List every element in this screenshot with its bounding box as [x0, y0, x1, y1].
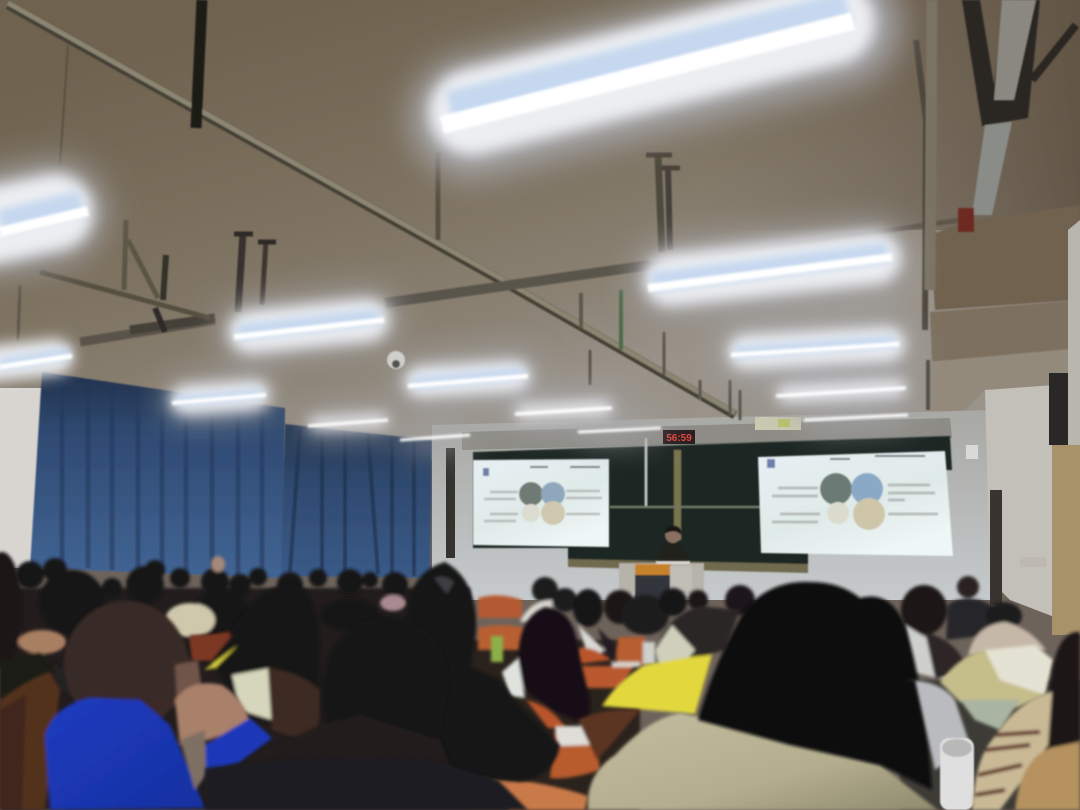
audience: student in blue jacket [0, 601, 272, 810]
audience: thermos bottle [940, 738, 974, 810]
curtain: left [30, 372, 285, 578]
audience: right back figures [901, 576, 1046, 680]
audience: far rows [16, 556, 408, 660]
lecturer [657, 526, 690, 564]
left side wall [0, 388, 42, 568]
podium [619, 561, 704, 600]
screen: left [473, 459, 609, 547]
audience: left edge student [0, 552, 66, 700]
front wall [432, 410, 992, 600]
audience: dark hair girl with cream top [190, 585, 320, 745]
clock display: 56:59 [666, 433, 692, 444]
audience: long hair with bottle [491, 607, 590, 728]
blackboard [473, 436, 952, 573]
audience: patchwork coat [905, 645, 1053, 770]
ceiling lights: halo [0, 8, 908, 440]
ceiling [0, 0, 1080, 460]
audience: centre black-haired student [245, 615, 455, 770]
ceiling lights: tubes [0, 21, 908, 440]
audience: striped-sweater student [972, 632, 1080, 810]
audience: front student in beige coat [588, 582, 938, 810]
duct cluster top right [958, 0, 1076, 232]
projector strip above boards [462, 418, 952, 450]
audience: yellow jumper [602, 606, 740, 714]
screen: right [758, 451, 953, 556]
wall column [446, 448, 455, 558]
audience backdrop [0, 588, 1080, 810]
curtain: right [281, 424, 432, 578]
ceiling pipes and brackets [8, 0, 960, 420]
desks and chairs [490, 710, 640, 810]
security camera [387, 351, 405, 369]
audience: ponytail girl [407, 562, 560, 782]
student foreground black jacket [205, 759, 528, 810]
audience: back centre and right [478, 577, 755, 688]
clock display [663, 430, 695, 444]
side wall right [966, 220, 1080, 635]
projector [755, 417, 801, 430]
